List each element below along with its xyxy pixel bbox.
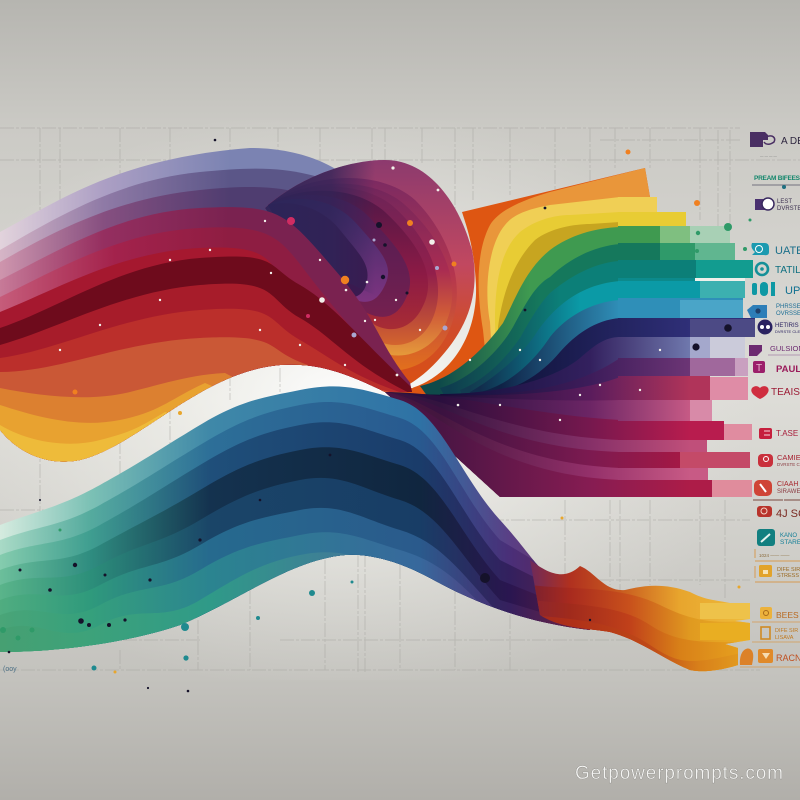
swirl: concentric crescents at the centre bbox=[265, 160, 475, 392]
upper wave: back bands bbox=[0, 148, 411, 462]
lower wave: teal, navy and violet bands bbox=[0, 386, 590, 652]
label: red badge item: CIAAH bbox=[777, 481, 798, 488]
label: orange square item bbox=[755, 549, 800, 582]
label: bars item: UP bbox=[785, 285, 800, 297]
label: blue camera item: PHRSSE bbox=[776, 304, 800, 310]
label: top flag item: — — — — bbox=[760, 154, 777, 158]
label: teal square item: KANO bbox=[780, 533, 797, 539]
label: ring item bbox=[756, 263, 800, 276]
label: purple flag item bbox=[749, 344, 800, 356]
label: bars item bbox=[752, 282, 800, 297]
label: BEES item bbox=[760, 607, 799, 620]
label: red circle item bbox=[758, 453, 800, 467]
label: outlined orange item: DIFE SIR bbox=[775, 628, 798, 634]
label: orange square item: 1024 —— —— bbox=[759, 553, 790, 558]
label: speech bubble item bbox=[751, 243, 800, 257]
paint splatter specks bbox=[0, 139, 752, 692]
label: red badge item: SIRAWE bbox=[777, 489, 800, 495]
label: magenta square item bbox=[753, 361, 800, 375]
label: red badge item bbox=[754, 480, 800, 496]
label: purple camera item bbox=[755, 198, 800, 212]
label: BEES item: BEES bbox=[776, 610, 799, 620]
watermark: Getpowerprompts.com bbox=[575, 763, 783, 784]
label: ring item: TATIL bbox=[775, 265, 800, 276]
label: teal heading with slider bbox=[752, 175, 800, 189]
label: RACN item bbox=[740, 648, 800, 667]
label: orange square item: DIFE SIR bbox=[777, 567, 800, 573]
label: heart item bbox=[751, 386, 800, 399]
label: teal heading with slider: PREAM BIFEES bbox=[754, 175, 800, 182]
label: purple camera item: LEST bbox=[777, 199, 792, 205]
label: teal square item bbox=[757, 529, 800, 546]
bottom left note: (ooy bbox=[3, 666, 17, 673]
upper wave: front bands, red to yellow bbox=[0, 207, 412, 462]
rainbow fan: stepped bar ends bbox=[618, 197, 755, 497]
rainbow fan: body of the right-hand flow bbox=[385, 168, 650, 497]
tail: red, orange and yellow ribbon bbox=[530, 560, 750, 672]
label: red box item bbox=[759, 428, 798, 439]
label: navy circle item: HETIRIS bbox=[775, 323, 799, 329]
label: heart item: TEAIS bbox=[771, 387, 800, 398]
label: red box item: T.ASE bbox=[776, 429, 798, 438]
label: outlined orange item bbox=[752, 622, 800, 642]
label: magenta square item: T bbox=[756, 363, 762, 374]
chart grid bbox=[0, 128, 800, 672]
label: blue camera item bbox=[747, 304, 800, 318]
label: red rounded item bbox=[753, 500, 800, 520]
label: navy circle item bbox=[758, 320, 800, 334]
label: outlined orange item: LISAVA bbox=[775, 635, 794, 641]
label: orange square item: STRESS bbox=[777, 573, 799, 579]
label: top flag item bbox=[750, 132, 800, 158]
